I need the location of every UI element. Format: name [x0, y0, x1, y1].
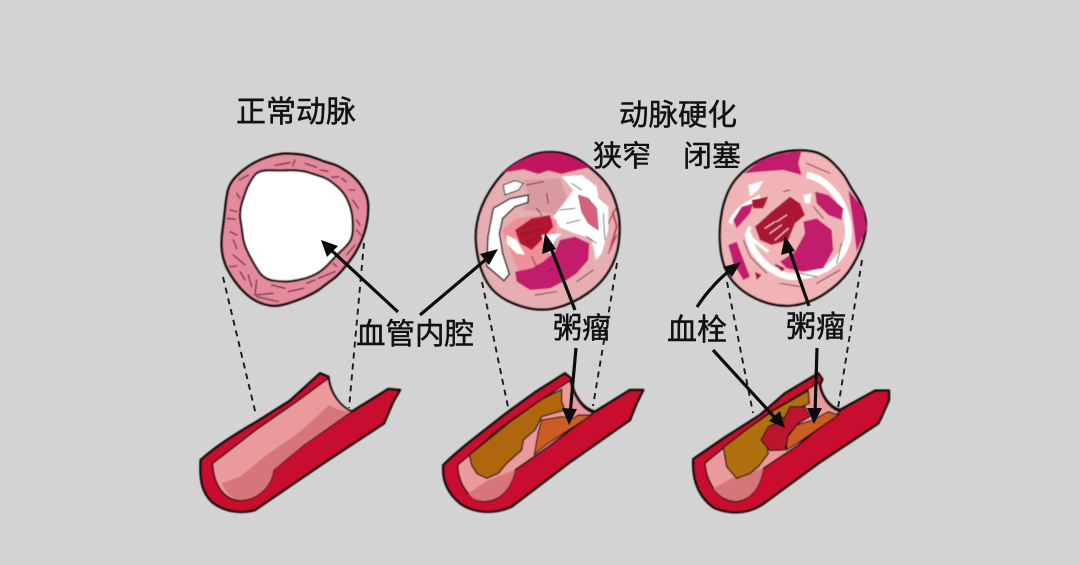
arrow: thrombus up — [697, 262, 741, 307]
cross-section: narrowed artery — [476, 152, 620, 310]
plaque: orange — [534, 415, 592, 454]
lipid core — [780, 218, 833, 272]
title: normal artery: 正常动脉 — [236, 96, 356, 129]
plaque core: dark red — [515, 215, 553, 250]
lumen: narrowed white channel — [487, 195, 528, 281]
arrow: atheroma down, occluded — [807, 348, 822, 424]
arrow: atheroma up, narrowed — [542, 233, 575, 310]
arrow: atheroma up, occluded — [781, 236, 809, 306]
mid tissue tone — [523, 178, 567, 215]
label: atheroma, narrowed: 粥瘤 — [553, 312, 611, 345]
white cracked tissue — [553, 175, 608, 260]
vessel: normal artery — [200, 373, 400, 512]
cross-section: occluded artery — [720, 150, 867, 306]
label: thrombus: 血栓 — [667, 314, 727, 347]
subtitle: occlusion: 闭塞 — [683, 140, 741, 173]
arrow: thrombus down — [713, 350, 785, 428]
thrombus core: dark red — [755, 197, 805, 245]
arrow: to narrowed lumen — [420, 249, 498, 315]
thrombus — [761, 407, 810, 451]
top plaque cap — [503, 153, 589, 174]
subtitle: narrowing: 狭窄 — [593, 140, 651, 173]
cross-section: normal artery — [222, 154, 368, 306]
lipid core: magenta — [515, 237, 589, 290]
plaque: orange — [787, 412, 838, 450]
label: atheroma, occluded: 粥瘤 — [786, 311, 846, 344]
wall texture — [227, 160, 361, 302]
plaque: brown — [723, 391, 809, 478]
vessel: occluded artery — [693, 373, 889, 512]
arrow: to normal lumen — [321, 240, 398, 312]
arrow: atheroma down, narrowed — [562, 348, 577, 425]
vessel: narrowed artery — [443, 373, 643, 512]
title: atherosclerosis: 动脉硬化 — [619, 99, 737, 132]
plaque: brown — [469, 389, 565, 478]
white crescent — [748, 175, 848, 277]
label: lumen: 血管内腔 — [356, 318, 474, 351]
